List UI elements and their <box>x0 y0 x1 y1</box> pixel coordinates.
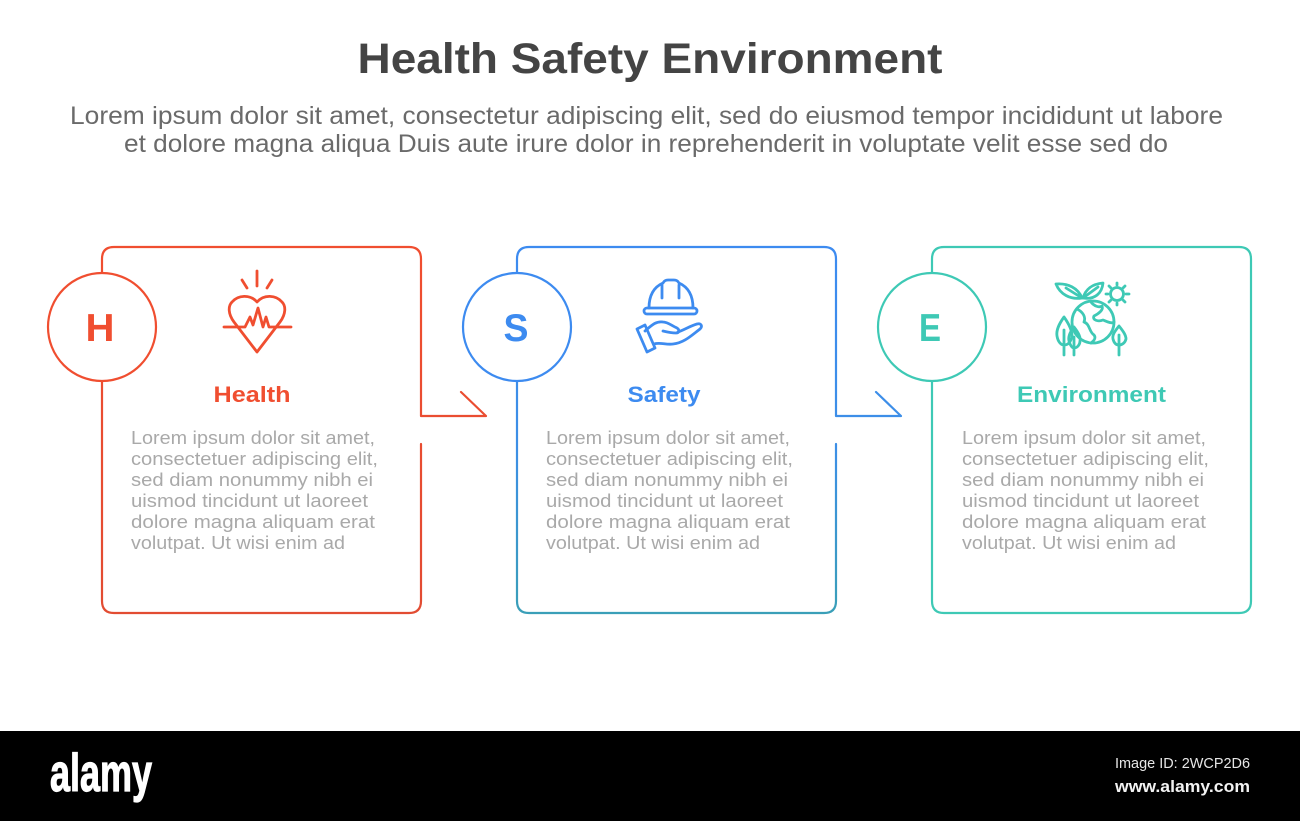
body text: health: volutpat. Ut wisi enim ad <box>131 532 345 553</box>
title: Health Safety Environment <box>358 35 942 83</box>
letter circle H: H <box>86 307 114 350</box>
body text: environment: dolore magna aliquam erat <box>962 511 1206 532</box>
icon: helmet over hand <box>637 280 701 352</box>
body text: health: consectetuer adipiscing elit, <box>131 448 378 469</box>
letter circle H <box>48 273 156 381</box>
letter circle S: S <box>504 307 528 350</box>
body text: environment: sed diam nonummy nibh ei <box>962 469 1204 490</box>
letter circle E <box>878 273 986 381</box>
heading: environment: Environment <box>1017 382 1167 407</box>
body text: health: uismod tincidunt ut laoreet <box>131 490 368 511</box>
box outline with arrow <box>517 247 901 613</box>
body text: safety: consectetuer adipiscing elit, <box>546 448 793 469</box>
body text: environment: consectetuer adipiscing elit, <box>962 448 1209 469</box>
footer url: www.alamy.com <box>1114 777 1250 796</box>
image id: Image ID: 2WCP2D6 <box>1115 755 1250 772</box>
box outline with arrow <box>102 247 486 613</box>
body text: environment <box>962 427 1209 553</box>
panel: environment <box>878 247 1251 613</box>
icon: globe with leaves, sun and trees <box>1056 283 1129 355</box>
footer logo: alamy <box>50 744 152 803</box>
body text: health <box>131 427 378 553</box>
body text: health: dolore magna aliquam erat <box>131 511 375 532</box>
body text: health: sed diam nonummy nibh ei <box>131 469 373 490</box>
body text: safety: dolore magna aliquam erat <box>546 511 790 532</box>
body text: environment: uismod tincidunt ut laoreet <box>962 490 1199 511</box>
body text: safety <box>546 427 793 553</box>
box outline <box>932 247 1251 613</box>
body text: safety: sed diam nonummy nibh ei <box>546 469 788 490</box>
body text: safety: volutpat. Ut wisi enim ad <box>546 532 760 553</box>
footer bar <box>0 731 1300 821</box>
letter circle S <box>463 273 571 381</box>
heading: safety: Safety <box>628 382 701 407</box>
intro text: et dolore magna aliqua Duis aute irure dolor in reprehenderit in voluptate velit esse sed do <box>124 130 1168 158</box>
body text: safety: uismod tincidunt ut laoreet <box>546 490 783 511</box>
body text: safety: Lorem ipsum dolor sit amet, <box>546 427 790 448</box>
body text: health: Lorem ipsum dolor sit amet, <box>131 427 375 448</box>
panel: safety <box>463 247 901 613</box>
intro text: Lorem ipsum dolor sit amet, consectetur adipiscing elit, sed do eiusmod tempor incididunt ut labore <box>70 102 1223 130</box>
icon: heart with pulse <box>224 271 291 352</box>
body text: environment: Lorem ipsum dolor sit amet, <box>962 427 1206 448</box>
body text: environment: volutpat. Ut wisi enim ad <box>962 532 1176 553</box>
heading: health: Health <box>214 382 290 407</box>
letter circle E: E <box>919 307 941 350</box>
intro text <box>70 102 1223 158</box>
panel: health <box>48 247 486 613</box>
